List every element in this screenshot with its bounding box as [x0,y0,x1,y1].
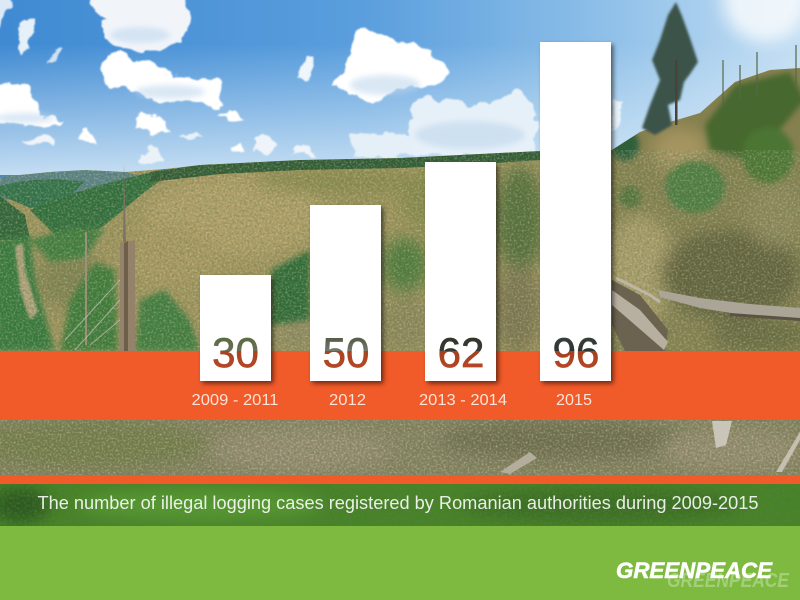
green footer [0,526,800,600]
bar: 2009-2011 [192,275,278,409]
shaded cloud bellies [0,27,525,149]
forest strip photo [0,484,800,526]
bar: 2013-2014: 62 [438,329,484,376]
caption: The number of illegal logging cases registered by Romanian authorities during 2009-2015 [38,493,759,513]
tall pine tree [642,2,698,135]
distant hills [0,170,150,208]
bar: 2015: 96 [553,329,599,376]
thin orange stripe [0,475,800,484]
logo: Greenpeace: GREENPEACE [616,558,773,583]
bar: 2015 [540,42,611,409]
bar: 2009-2011: 2009 - 2011 [192,392,278,409]
right hillside tones [605,128,800,353]
treeline on ridge [150,151,540,182]
bar: 2012 [310,205,381,409]
small firs on skyline [723,45,796,105]
bar: 2013-2014 [419,162,507,409]
logo: Greenpeace [616,558,790,592]
terrain [0,60,800,355]
sky [0,0,800,177]
grain texture [0,150,800,351]
bar: 2013-2014: 2013 - 2014 [419,392,507,409]
ground strip photo [0,420,800,475]
fallen logs [612,278,800,351]
clear-cut hillside tones [35,165,545,355]
foreground conifers [0,228,310,351]
bar: 2009-2011: 30 [212,329,259,376]
bar: 2012: 2012 [329,392,366,409]
bar: 2012: 50 [323,329,369,376]
forest slope left [30,169,170,240]
dirt track [15,243,38,320]
bar: 2015: 2015 [556,392,592,409]
orange band [0,351,800,420]
broken tree trunk [65,165,135,351]
shrubs on right hillside [611,72,800,213]
photo background: deforested hillside [0,0,800,355]
clouds [0,0,624,164]
base terrain colour [0,150,612,351]
